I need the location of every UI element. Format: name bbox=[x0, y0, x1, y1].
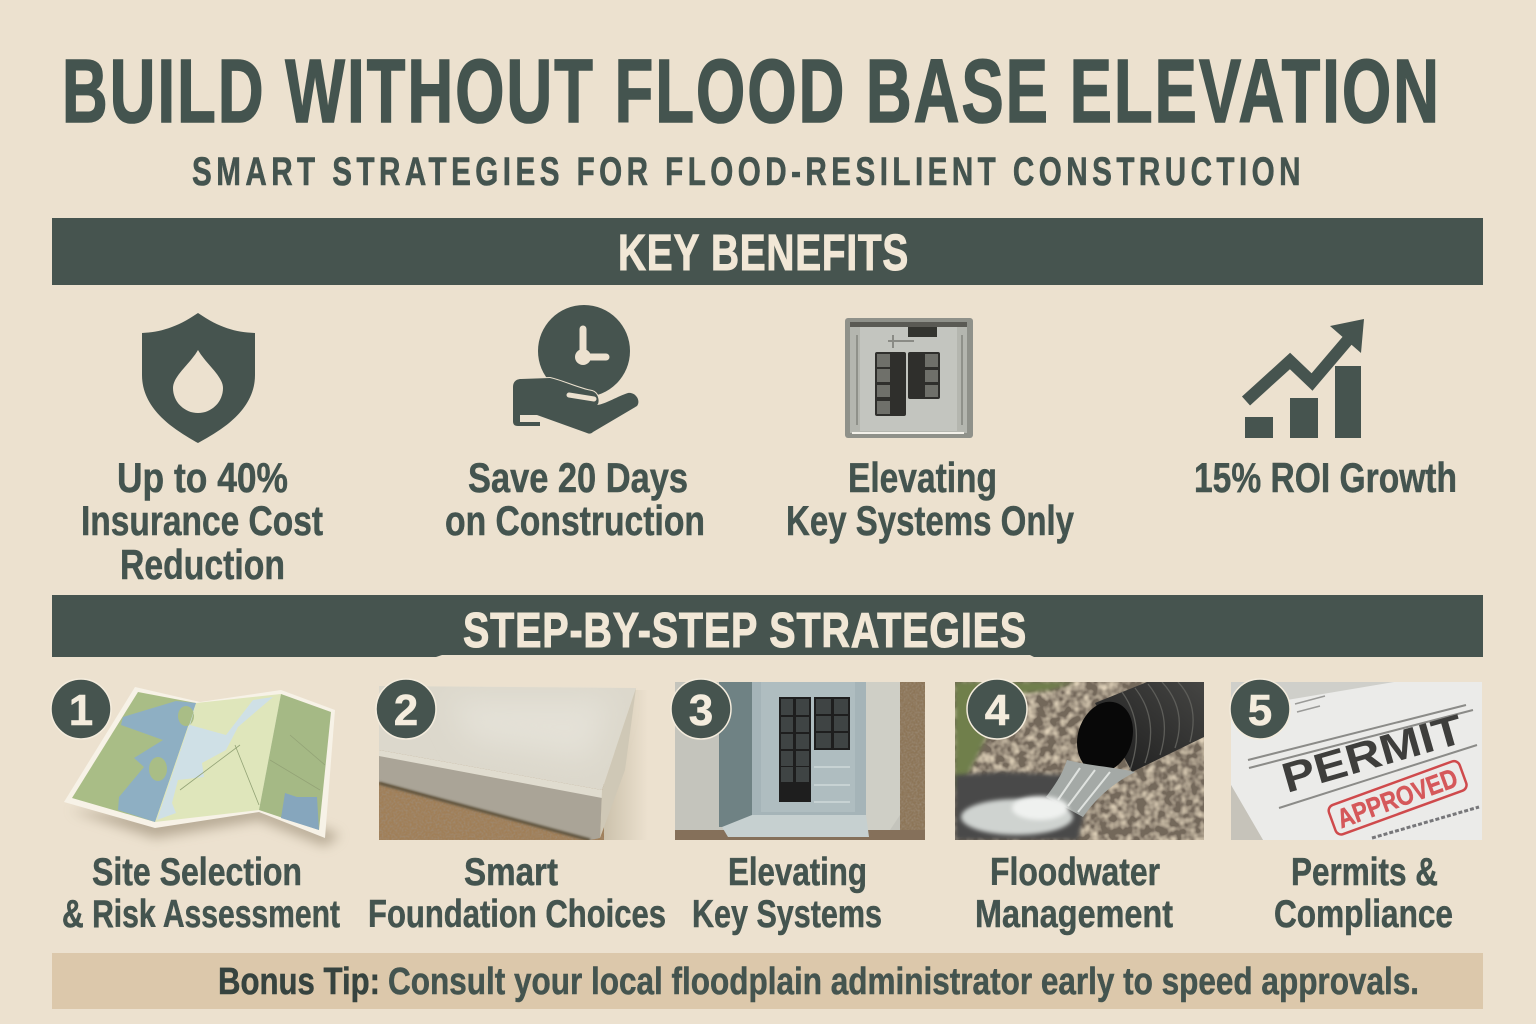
benefit text: Save 20 Days bbox=[468, 454, 688, 501]
image: concrete slab bbox=[379, 686, 648, 840]
section header: key benefits: KEY BENEFITS bbox=[618, 224, 909, 281]
number badge 1: 1 bbox=[69, 686, 93, 735]
number badge 5 bbox=[1230, 679, 1290, 739]
benefit text bbox=[445, 454, 705, 544]
benefit text: Key Systems Only bbox=[786, 497, 1075, 544]
benefit: ROI growth bbox=[1194, 319, 1457, 501]
step label: Elevating bbox=[728, 851, 867, 894]
benefit text: Up to 40% bbox=[117, 454, 288, 501]
step label bbox=[62, 851, 340, 936]
step label: Foundation Choices bbox=[368, 893, 666, 936]
benefit: insurance cost reduction bbox=[81, 313, 323, 588]
step label bbox=[692, 851, 882, 936]
step label bbox=[368, 851, 666, 936]
image: drain pipe on gravel bbox=[955, 682, 1204, 840]
step 4: floodwater management bbox=[955, 679, 1204, 936]
number badge 2 bbox=[376, 679, 436, 739]
number badge 4 bbox=[967, 679, 1027, 739]
section header: key benefits bbox=[52, 218, 1483, 285]
benefit text: Elevating bbox=[848, 454, 997, 501]
number badge 3: 3 bbox=[689, 686, 713, 735]
number badge 2: 2 bbox=[394, 686, 418, 735]
section header: step-by-step strategies: STEP-BY-STEP STRATEGIES bbox=[463, 604, 1027, 658]
step 5: permits and compliance bbox=[1230, 679, 1482, 936]
number badge 1 bbox=[51, 679, 111, 739]
step 2: smart foundation bbox=[368, 679, 666, 936]
number badge 3 bbox=[671, 679, 731, 739]
step label: Floodwater bbox=[990, 851, 1160, 894]
image: approved permit document: PERMIT bbox=[1277, 705, 1469, 802]
step 1: site selection bbox=[51, 679, 340, 936]
step label: Key Systems bbox=[692, 893, 882, 936]
benefit text: Reduction bbox=[120, 541, 285, 588]
icon: shield with water drop bbox=[142, 313, 255, 443]
number badge 4: 4 bbox=[985, 686, 1010, 735]
step label bbox=[975, 851, 1173, 936]
step label: Smart bbox=[464, 851, 558, 894]
benefit text bbox=[786, 454, 1075, 544]
step label: Compliance bbox=[1274, 893, 1453, 936]
section header: step-by-step strategies bbox=[52, 595, 1483, 658]
benefit text: 15% ROI Growth bbox=[1194, 454, 1457, 501]
step label: & Risk Assessment bbox=[62, 893, 340, 936]
benefit text: Insurance Cost bbox=[81, 497, 323, 544]
image: approved permit document: APPROVED bbox=[1333, 763, 1462, 834]
benefit: save construction days bbox=[445, 305, 705, 544]
step label: Permits & bbox=[1291, 851, 1438, 894]
icon: electrical panel bbox=[845, 318, 973, 438]
image: wall-mounted breaker panel bbox=[675, 682, 925, 840]
step label bbox=[1274, 851, 1453, 936]
icon: rising bar chart with arrow bbox=[1245, 319, 1364, 438]
step 3: elevating key systems bbox=[671, 679, 925, 936]
benefit text bbox=[81, 454, 323, 588]
image: approved permit document bbox=[1231, 682, 1482, 840]
icon: clock over open hand bbox=[513, 305, 638, 434]
number badge 5: 5 bbox=[1248, 686, 1272, 735]
image: folded map bbox=[64, 687, 340, 846]
bonus tip banner bbox=[52, 953, 1483, 1009]
benefit: elevating key systems bbox=[786, 318, 1075, 544]
benefit text: on Construction bbox=[445, 497, 705, 544]
step label: Management bbox=[975, 893, 1173, 936]
bonus tip banner: Bonus Tip: bbox=[218, 961, 380, 1003]
step label: Site Selection bbox=[92, 851, 302, 894]
